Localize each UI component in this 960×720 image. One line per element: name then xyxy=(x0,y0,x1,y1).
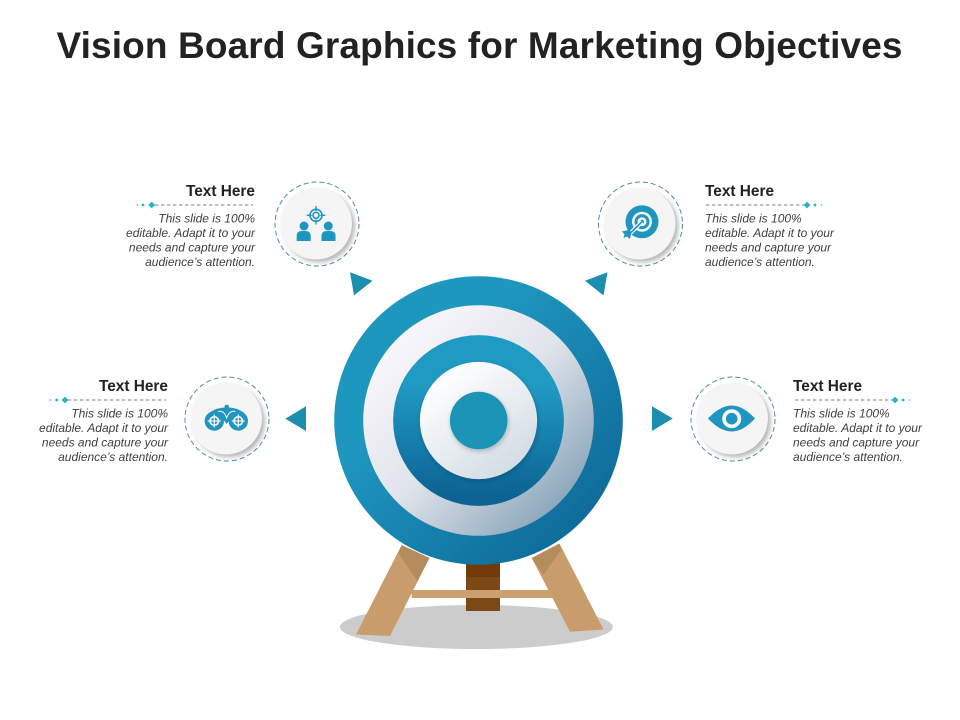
icon circle xyxy=(185,377,269,461)
title: Vision Board Graphics for Marketing Objectives xyxy=(56,25,902,66)
body text: editable. Adapt it to your xyxy=(793,421,923,435)
heading: Text Here xyxy=(705,183,774,200)
second ring xyxy=(363,305,594,536)
target board xyxy=(334,276,623,565)
arrow: right xyxy=(652,406,673,431)
arrow: left xyxy=(285,406,306,431)
body text: audience’s attention. xyxy=(793,450,903,464)
ground shadow xyxy=(340,605,613,649)
divider with diamonds xyxy=(137,202,253,208)
arrow: top left xyxy=(350,272,372,296)
body text: needs and capture your xyxy=(793,435,920,449)
panel: top right xyxy=(598,182,835,269)
divider with diamonds xyxy=(50,397,166,403)
body text: audience’s attention. xyxy=(145,255,255,269)
panel: top left xyxy=(126,182,359,269)
body text: needs and capture your xyxy=(705,240,832,254)
heading: Text Here xyxy=(99,378,168,395)
heading: Text Here xyxy=(186,183,255,200)
body text: editable. Adapt it to your xyxy=(705,226,835,240)
target stand xyxy=(340,544,613,649)
body text: audience’s attention. xyxy=(58,450,168,464)
icon circle xyxy=(691,377,775,461)
right leg xyxy=(532,544,604,632)
crossbar xyxy=(412,590,553,598)
divider with diamonds xyxy=(706,202,822,208)
icon circle xyxy=(275,182,359,266)
body text: This slide is 100% xyxy=(793,407,890,421)
body text: This slide is 100% xyxy=(158,212,255,226)
divider with diamonds xyxy=(795,397,910,403)
outer ring xyxy=(334,276,623,565)
arrow: top right xyxy=(585,272,608,296)
icon: target with arrow xyxy=(622,205,658,239)
panel: bottom left xyxy=(39,377,269,464)
left leg xyxy=(356,545,430,636)
body text: This slide is 100% xyxy=(71,407,168,421)
body text: audience’s attention. xyxy=(705,255,815,269)
icon: eye xyxy=(708,406,755,432)
body text: needs and capture your xyxy=(129,240,256,254)
body text: editable. Adapt it to your xyxy=(39,421,169,435)
heading: Text Here xyxy=(793,378,862,395)
icon: binoculars xyxy=(205,405,248,431)
centre post xyxy=(466,560,500,611)
body text: needs and capture your xyxy=(42,435,169,449)
third ring xyxy=(393,335,564,506)
body text: This slide is 100% xyxy=(705,212,802,226)
panel: bottom right xyxy=(691,377,923,464)
fourth ring xyxy=(420,362,537,479)
bullseye xyxy=(450,392,508,449)
icon: people and target xyxy=(297,206,336,241)
body text: editable. Adapt it to your xyxy=(126,226,256,240)
icon circle xyxy=(598,182,682,266)
